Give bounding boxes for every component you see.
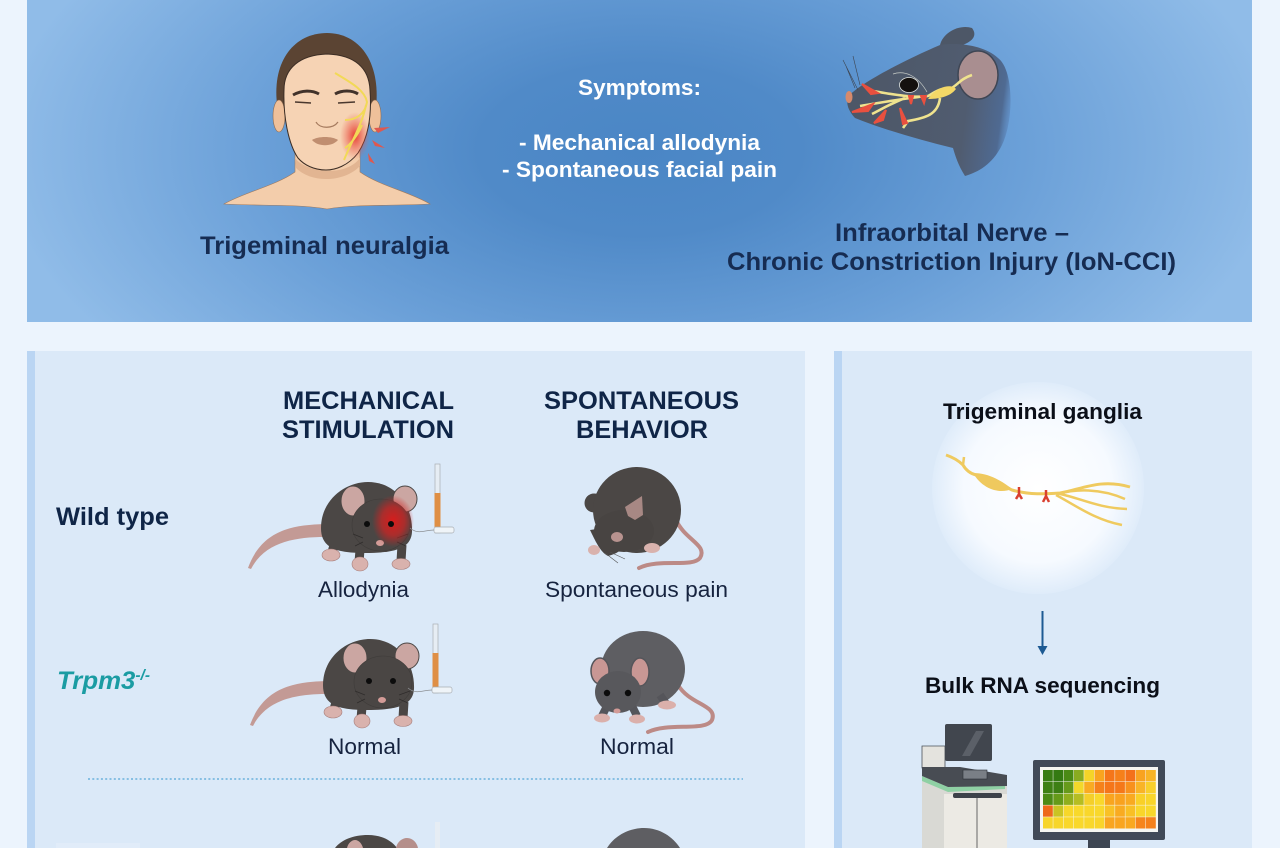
heading: IoN-CCI model: Chronic Constriction Injury (IoN-CCI) xyxy=(727,248,1176,276)
text block: symptoms: Symptoms: xyxy=(578,75,701,100)
row label: wild type: Wild type xyxy=(56,503,169,531)
row label: Trpm3 knockout: Trpm3 xyxy=(57,667,133,695)
icon: wild type mouse with allodynia xyxy=(248,464,454,571)
text block: symptoms xyxy=(502,75,777,182)
panel: transcriptomics workflow xyxy=(834,351,1252,848)
icon: patient with facial pain xyxy=(224,33,430,209)
panel: hero symptoms banner xyxy=(27,0,1252,322)
heading: IoN-CCI model xyxy=(727,219,1176,276)
icon: trigeminal nerve with ligatures xyxy=(946,455,1130,525)
heading: mechanical stimulation xyxy=(282,387,454,444)
icon: third row mouse spontaneous, cropped by page edge xyxy=(607,828,680,848)
heading: mechanical stimulation: MECHANICAL xyxy=(283,387,454,415)
icon: third row mouse mechanical, cropped by page edge xyxy=(335,822,440,848)
icon: Trpm3 knockout mouse spontaneous normal xyxy=(591,631,713,732)
label: normal spontaneous: Normal xyxy=(600,734,674,759)
heading: IoN-CCI model: Infraorbital Nerve – xyxy=(835,219,1069,247)
heading: spontaneous behavior: SPONTANEOUS xyxy=(544,387,739,415)
icon: sequencing machine xyxy=(922,724,1007,848)
circular glow behind ganglia xyxy=(932,382,1144,594)
arrow: ganglia to sequencing xyxy=(1038,611,1048,655)
text block: symptoms: - Mechanical allodynia xyxy=(519,130,761,155)
icon: wild type mouse in spontaneous pain xyxy=(584,467,702,568)
faint cropped row label xyxy=(56,843,140,848)
icon: heatmap monitor xyxy=(1033,760,1165,848)
heading: mechanical stimulation: STIMULATION xyxy=(282,416,454,444)
icon: rat head with injured nerve xyxy=(843,27,1011,176)
heading: trigeminal ganglia: Trigeminal ganglia xyxy=(943,399,1143,424)
chart: expression heatmap xyxy=(1043,770,1156,828)
heading: spontaneous behavior xyxy=(544,387,739,444)
icon: Trpm3 knockout mouse mechanical normal xyxy=(250,624,452,728)
panel: behavior comparison xyxy=(27,351,805,848)
row label: Trpm3 knockout: -/- xyxy=(135,667,150,684)
label: normal mechanical: Normal xyxy=(328,734,401,759)
heading: spontaneous behavior: BEHAVIOR xyxy=(576,416,708,444)
text block: symptoms: - Spontaneous facial pain xyxy=(502,157,777,182)
label: allodynia: Allodynia xyxy=(318,577,410,602)
heading: bulk RNA sequencing: Bulk RNA sequencing xyxy=(925,673,1160,698)
label: spontaneous pain: Spontaneous pain xyxy=(545,577,728,602)
heading: trigeminal neuralgia: Trigeminal neuralgia xyxy=(200,232,450,260)
